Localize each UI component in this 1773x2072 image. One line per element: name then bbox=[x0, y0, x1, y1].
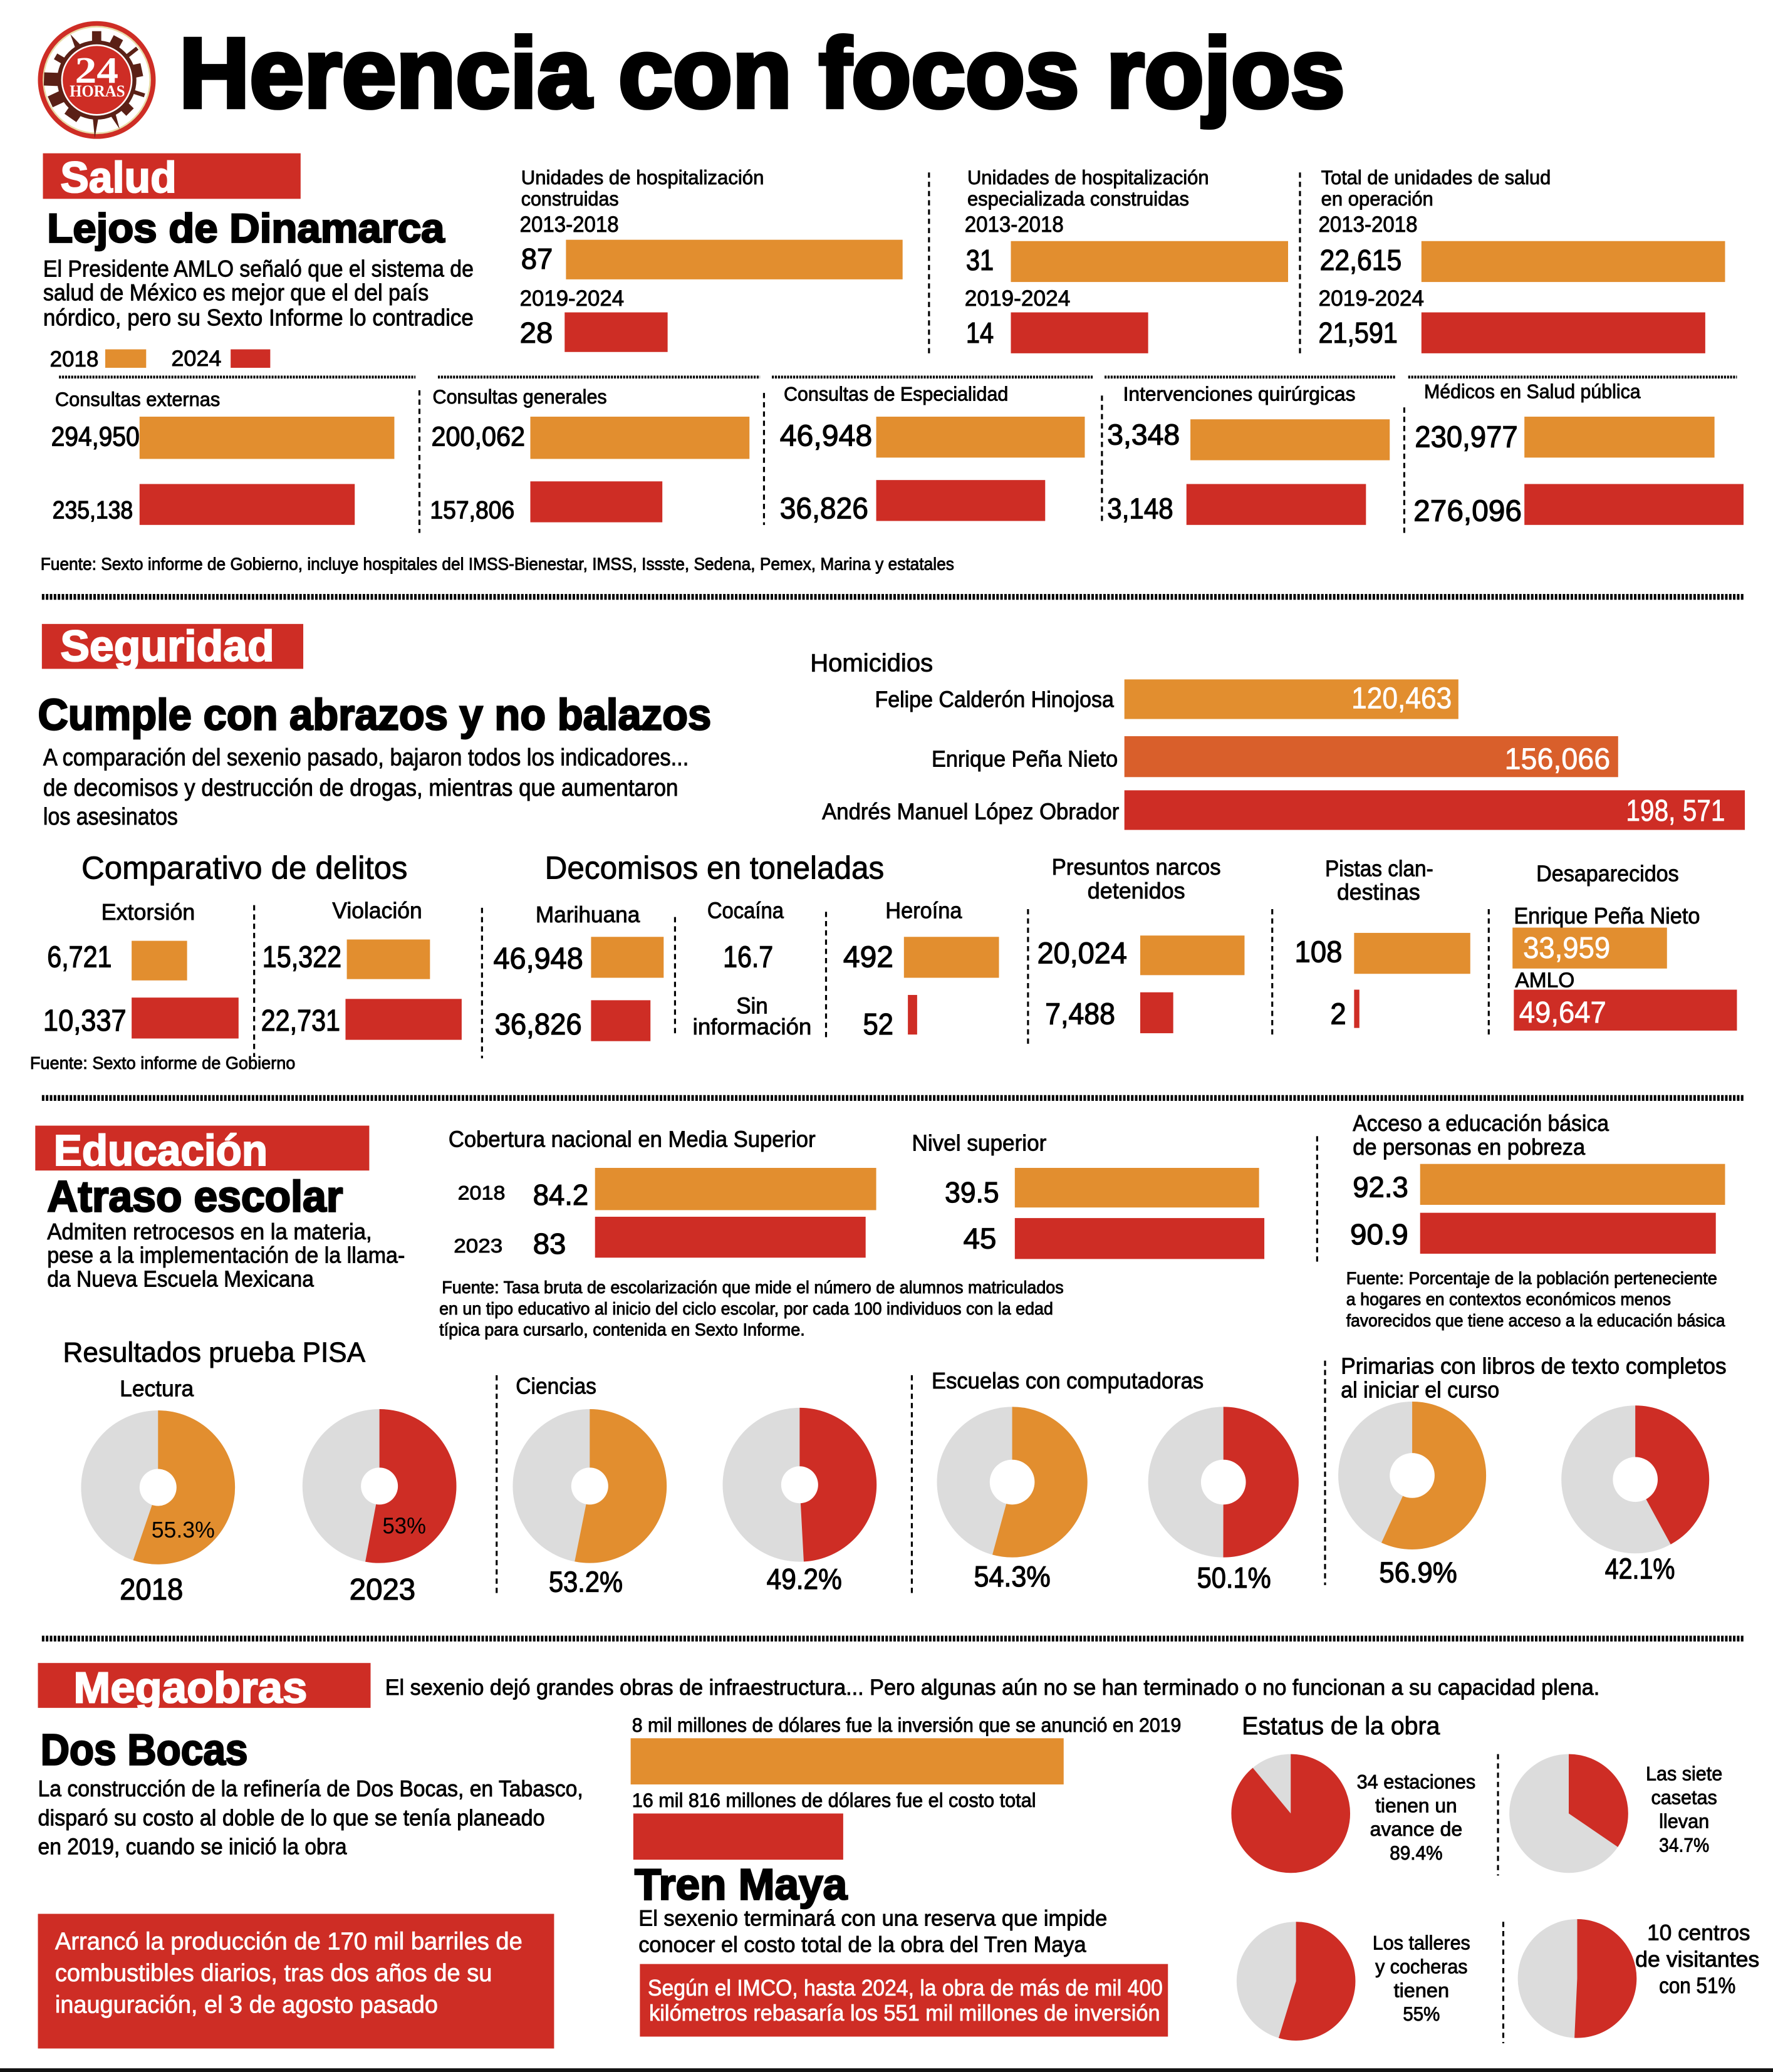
pie: estaciones: 89.4% bbox=[1390, 1841, 1443, 1864]
chart: homicidios: Felipe Calderón Hinojosa bbox=[875, 687, 1114, 712]
source note: población: favorecidos que tiene acceso a la educación básica bbox=[1346, 1311, 1725, 1330]
chart: total de unidades de salud: 2019-2024 bbox=[1318, 287, 1424, 311]
chart: consultas generales: 157,806 bbox=[430, 496, 514, 524]
source note: Seguridad: Fuente: Sexto informe de Gobierno bbox=[30, 1053, 295, 1073]
text block: Salud intro: El Presidente AMLO señaló que el sistema de bbox=[43, 256, 474, 282]
chart: pistas clandestinas: 2 bbox=[1330, 997, 1346, 1031]
donuts: ciencias: Ciencias bbox=[516, 1373, 596, 1398]
chart: heroína: Heroína bbox=[885, 898, 962, 924]
chart: médicos en salud pública bbox=[1413, 380, 1744, 528]
logo: 24 Horas bbox=[38, 21, 155, 139]
chart: presuntos narcos detenidos: detenidos bbox=[1088, 878, 1185, 903]
donuts: lectura: 53% bbox=[382, 1514, 426, 1539]
legend bbox=[49, 347, 270, 372]
callout: producción: Arrancó la producción de 170 mil barriles de bbox=[55, 1928, 523, 1955]
heading: Decomisos en toneladas: Decomisos en toneladas bbox=[545, 850, 884, 886]
chart: costo Dos Bocas bbox=[631, 1714, 1181, 1860]
chart: extorsión: Extorsión bbox=[101, 900, 195, 925]
chart: consultas generales: Consultas generales bbox=[433, 385, 607, 408]
source note: población: Fuente: Porcentaje de la población perteneciente bbox=[1346, 1268, 1717, 1288]
heading: Tren Maya: Tren Maya bbox=[635, 1860, 848, 1908]
donuts: primarias con libros de texto: 56.9% bbox=[1379, 1556, 1457, 1589]
text block: Educación intro: Admiten retrocesos en la materia, bbox=[47, 1219, 372, 1244]
source note: Salud: Fuente: Sexto informe de Gobierno, incluye hospitales del IMSS-Bienestar, IMSS, Issste, Sedena, Pemex, Marina y estatales bbox=[41, 554, 954, 573]
text block: Tren Maya: El sexenio terminará con una reserva que impide bbox=[638, 1907, 1107, 1931]
chart: extorsión: 10,337 bbox=[43, 1004, 127, 1038]
source note: tasa bruta: en un tipo educativo al inicio del ciclo escolar, por cada 100 individuos con la edad bbox=[439, 1299, 1053, 1318]
chart: presuntos narcos detenidos bbox=[1037, 855, 1244, 1033]
chart: unidades de hospitalización especializada: 2019-2024 bbox=[965, 287, 1070, 311]
callout: producción: combustibles diarios, tras dos años de su bbox=[55, 1960, 492, 1987]
text block: Dos Bocas bbox=[38, 1776, 583, 1860]
chart: consultas de especialidad: 46,948 bbox=[780, 419, 872, 452]
chart: unidades de hospitalización construidas: construidas bbox=[521, 187, 619, 210]
chart: intervenciones quirúrgicas: 3,348 bbox=[1107, 418, 1180, 450]
chart: desaparecidos: Enrique Peña Nieto bbox=[1514, 903, 1700, 929]
donuts: escuelas con computadoras: 54.3% bbox=[974, 1560, 1051, 1593]
chart: unidades de hospitalización especializada: 14 bbox=[966, 316, 994, 349]
text block: Seguridad intro: de decomisos y destrucción de drogas, mientras que aumentaron bbox=[43, 775, 678, 801]
chart: unidades de hospitalización construidas: 2013-2018 bbox=[520, 213, 619, 237]
chart: consultas generales bbox=[430, 385, 749, 524]
chart: heroína bbox=[843, 898, 999, 1041]
donuts: primarias con libros de texto: al iniciar el curso bbox=[1341, 1378, 1499, 1403]
donuts: primarias con libros de texto bbox=[1338, 1354, 1727, 1589]
chart: acceso a educación básica: de personas en pobreza bbox=[1353, 1135, 1585, 1160]
donuts: lectura bbox=[81, 1377, 456, 1606]
chart: costo Dos Bocas: 8 mil millones de dólares fue la inversión que se anunció en 2019 bbox=[632, 1714, 1181, 1736]
chart: médicos en salud pública: 230,977 bbox=[1415, 420, 1518, 454]
chart: consultas externas: 294,950 bbox=[51, 422, 140, 452]
source note: tasa bruta: Fuente: Tasa bruta de escolarización que mide el número de alumnos matriculados bbox=[442, 1278, 1064, 1297]
text block: Educación intro bbox=[47, 1219, 405, 1292]
chart: nivel superior: 39.5 bbox=[945, 1176, 999, 1209]
chart: acceso a educación básica bbox=[1350, 1111, 1725, 1254]
text block: Dos Bocas: disparó su costo al doble de lo que se tenía planeado bbox=[38, 1805, 545, 1830]
text block: Dos Bocas: en 2019, cuando se inició la obra bbox=[38, 1835, 347, 1860]
chart: cocaína: Sin bbox=[736, 993, 768, 1018]
chart: cobertura media superior: Cobertura nacional en Media Superior bbox=[449, 1127, 816, 1152]
chart: intervenciones quirúrgicas: 3,148 bbox=[1107, 492, 1173, 524]
pie: centros de visitantes: de visitantes bbox=[1635, 1948, 1759, 1972]
chart: homicidios bbox=[810, 650, 1745, 830]
source note: tasa bruta: típica para cursarlo, contenida en Sexto Informe. bbox=[439, 1320, 805, 1340]
donuts: lectura: 55.3% bbox=[152, 1518, 215, 1543]
chart: homicidios: Enrique Peña Nieto bbox=[932, 746, 1118, 771]
chart: presuntos narcos detenidos: 20,024 bbox=[1037, 936, 1127, 970]
chart: cocaína bbox=[693, 898, 811, 1039]
text block: Seguridad intro bbox=[43, 744, 689, 830]
chart: intervenciones quirúrgicas: Intervenciones quirúrgicas bbox=[1123, 383, 1355, 405]
chart: pistas clandestinas: Pistas clan- bbox=[1325, 856, 1433, 881]
section banner: Seguridad: Seguridad bbox=[60, 622, 274, 670]
pie: talleres: Los talleres bbox=[1373, 1931, 1470, 1954]
section banner: Educación bbox=[35, 1126, 369, 1175]
donuts: primarias con libros de texto: 42.1% bbox=[1605, 1552, 1675, 1585]
panel: Salud bbox=[41, 153, 1744, 573]
pie: centros de visitantes: 10 centros bbox=[1647, 1922, 1750, 1945]
text block: Educación intro: pese a la implementación de la llama- bbox=[47, 1243, 405, 1268]
pie: talleres: y cocheras bbox=[1375, 1955, 1468, 1977]
pie: estaciones: 34 estaciones bbox=[1357, 1770, 1475, 1793]
chart: violación bbox=[261, 898, 462, 1040]
pie: casetas: casetas bbox=[1651, 1786, 1717, 1809]
chart: desaparecidos: Desaparecidos bbox=[1536, 862, 1679, 887]
chart: consultas externas: 235,138 bbox=[53, 496, 133, 524]
section banner: Megaobras: Megaobras bbox=[73, 1663, 307, 1712]
donuts: ciencias bbox=[512, 1373, 876, 1598]
title: Herencia con focos rojos bbox=[179, 18, 1345, 128]
chart: desaparecidos: 33,959 bbox=[1523, 931, 1610, 965]
donuts: ciencias: 53.2% bbox=[549, 1565, 623, 1598]
chart: marihuana: 36,826 bbox=[495, 1007, 582, 1041]
chart: heroína: 52 bbox=[863, 1007, 893, 1041]
chart: consultas externas bbox=[51, 388, 394, 525]
pie: talleres: 55% bbox=[1403, 2002, 1440, 2025]
chart: consultas externas: Consultas externas bbox=[55, 388, 220, 410]
chart: violación: 15,322 bbox=[263, 940, 341, 974]
chart: consultas de especialidad: 36,826 bbox=[780, 491, 868, 525]
chart: cocaína: 16.7 bbox=[723, 940, 773, 974]
pie: estaciones: tienen un bbox=[1375, 1794, 1457, 1816]
chart: cobertura media superior: 2018 bbox=[458, 1182, 505, 1204]
text block: Megaobras intro: El sexenio dejó grandes obras de infraestructura... Pero algunas aún no se han terminado o no funcionan a su capacidad plena. bbox=[385, 1676, 1599, 1700]
logo: 24 Horas: 24 bbox=[75, 49, 118, 91]
text block: Tren Maya: conocer el costo total de la obra del Tren Maya bbox=[638, 1934, 1086, 1957]
section banner: Salud: Salud bbox=[60, 153, 177, 202]
text block: Salud intro: nórdico, pero su Sexto Informe lo contradice bbox=[43, 305, 474, 331]
chart: acceso a educación básica: 92.3 bbox=[1353, 1170, 1408, 1203]
chart: acceso a educación básica: 90.9 bbox=[1350, 1218, 1408, 1251]
source note: tasa bruta bbox=[439, 1278, 1064, 1340]
pie: casetas: Las siete bbox=[1646, 1762, 1722, 1785]
source note: población: a hogares en contextos económicos menos bbox=[1346, 1289, 1671, 1309]
chart: intervenciones quirúrgicas bbox=[1107, 383, 1390, 525]
chart: pistas clandestinas: 108 bbox=[1295, 935, 1342, 969]
text block: Tren Maya bbox=[638, 1907, 1107, 1957]
chart: violación: Violación bbox=[332, 898, 422, 924]
chart: costo Dos Bocas: 16 mil 816 millones de dólares fue el costo total bbox=[632, 1789, 1036, 1811]
donuts: lectura: 2023 bbox=[350, 1573, 415, 1606]
pie: estaciones: avance de bbox=[1370, 1818, 1462, 1840]
logo: 24 Horas: HORAS bbox=[70, 82, 125, 100]
heading: Dos Bocas: Dos Bocas bbox=[41, 1725, 248, 1774]
chart: unidades de hospitalización construidas bbox=[520, 166, 903, 352]
chart: desaparecidos: AMLO bbox=[1515, 968, 1574, 992]
callout: IMCO: Según el IMCO, hasta 2024, la obra de más de mil 400 bbox=[648, 1976, 1163, 2001]
heading: Atraso escolar: Atraso escolar bbox=[47, 1172, 343, 1221]
donuts: lectura: Lectura bbox=[120, 1377, 194, 1402]
callout: IMCO bbox=[640, 1964, 1168, 2037]
panel: Megaobras bbox=[38, 1663, 1759, 2048]
chart: consultas de especialidad bbox=[780, 383, 1084, 525]
chart: homicidios: Andrés Manuel López Obrador bbox=[822, 799, 1119, 825]
heading: Resultados prueba PISA: Resultados prueba PISA bbox=[63, 1338, 366, 1368]
chart: consultas generales: 200,062 bbox=[431, 422, 525, 452]
chart: cobertura media superior: 84.2 bbox=[533, 1179, 588, 1211]
chart: cocaína: Cocaína bbox=[707, 898, 784, 924]
chart: cocaína: información bbox=[693, 1014, 811, 1039]
chart: médicos en salud pública: 276,096 bbox=[1413, 494, 1522, 528]
chart: cobertura media superior: 83 bbox=[533, 1227, 566, 1260]
section banner: Educación: Educación bbox=[54, 1126, 268, 1175]
chart: unidades de hospitalización especializada: Unidades de hospitalización bbox=[967, 166, 1209, 189]
chart: total de unidades de salud: 21,591 bbox=[1318, 316, 1398, 349]
section banner: Megaobras bbox=[38, 1663, 371, 1712]
chart: total de unidades de salud bbox=[1318, 166, 1725, 353]
pie: casetas: llevan bbox=[1659, 1810, 1709, 1833]
chart: heroína: 492 bbox=[843, 940, 893, 974]
legend: 2018 bbox=[49, 348, 98, 372]
chart: nivel superior: Nivel superior bbox=[912, 1131, 1046, 1156]
text block: Salud intro: salud de México es mejor que el del país bbox=[43, 280, 429, 306]
panel: Educación bbox=[35, 1111, 1727, 1606]
chart: extorsión bbox=[43, 900, 239, 1039]
chart: nivel superior: 45 bbox=[964, 1222, 996, 1255]
text block: Seguridad intro: A comparación del sexenio pasado, bajaron todos los indicadores... bbox=[43, 744, 689, 771]
chart: unidades de hospitalización especializada: 31 bbox=[966, 244, 994, 276]
chart: unidades de hospitalización especializada: especializada construidas bbox=[967, 187, 1189, 210]
chart: unidades de hospitalización construidas: 2019-2024 bbox=[520, 287, 624, 311]
chart: presuntos narcos detenidos: Presuntos narcos bbox=[1052, 855, 1221, 880]
callout: producción: inauguración, el 3 de agosto pasado bbox=[55, 1992, 438, 2019]
chart: total de unidades de salud: Total de unidades de salud bbox=[1321, 166, 1551, 189]
chart: pistas clandestinas: destinas bbox=[1337, 880, 1420, 905]
text block: Salud intro bbox=[43, 256, 474, 331]
source note: población bbox=[1346, 1268, 1725, 1330]
donuts: primarias con libros de texto: Primarias con libros de texto completos bbox=[1341, 1354, 1727, 1379]
donuts: lectura: 2018 bbox=[120, 1573, 183, 1606]
heading: Comparativo de delitos: Comparativo de delitos bbox=[81, 850, 408, 886]
chart: marihuana bbox=[493, 902, 663, 1041]
chart: total de unidades de salud: 22,615 bbox=[1320, 244, 1401, 276]
chart: unidades de hospitalización especializada: 2013-2018 bbox=[965, 213, 1064, 237]
pie: centros de visitantes: con 51% bbox=[1659, 1974, 1735, 1998]
chart: desaparecidos: 49,647 bbox=[1519, 996, 1606, 1029]
chart: total de unidades de salud: en operación bbox=[1321, 187, 1433, 210]
pie: talleres: tienen bbox=[1394, 1979, 1449, 2001]
chart: extorsión: 6,721 bbox=[47, 940, 112, 974]
text block: Educación intro: da Nueva Escuela Mexicana bbox=[47, 1267, 314, 1292]
donuts: ciencias: 49.2% bbox=[767, 1563, 842, 1595]
donuts: escuelas con computadoras: Escuelas con computadoras bbox=[932, 1368, 1204, 1393]
pie: casetas: 34.7% bbox=[1659, 1834, 1709, 1856]
chart: unidades de hospitalización construidas: 28 bbox=[520, 316, 553, 349]
chart: pistas clandestinas bbox=[1295, 856, 1470, 1031]
chart: cobertura media superior bbox=[449, 1127, 876, 1260]
chart: presuntos narcos detenidos: 7,488 bbox=[1045, 997, 1115, 1031]
pie: centros de visitantes bbox=[1518, 1919, 1759, 2038]
text block: Dos Bocas: La construcción de la refinería de Dos Bocas, en Tabasco, bbox=[38, 1776, 583, 1801]
section banner: Salud bbox=[43, 153, 301, 202]
chart: consultas de especialidad: Consultas de Especialidad bbox=[784, 383, 1008, 405]
pie: talleres bbox=[1237, 1922, 1470, 2041]
panel: Seguridad bbox=[30, 622, 1745, 1073]
heading: Estatus de la obra: Estatus de la obra bbox=[1242, 1712, 1440, 1740]
chart: acceso a educación básica: Acceso a educación básica bbox=[1353, 1111, 1609, 1136]
callout: producción bbox=[38, 1914, 554, 2048]
chart: cobertura media superior: 2023 bbox=[454, 1234, 502, 1257]
chart: marihuana: Marihuana bbox=[536, 902, 640, 927]
chart: homicidios: 156,066 bbox=[1505, 742, 1610, 776]
text block: Seguridad intro: los asesinatos bbox=[43, 804, 178, 830]
donuts: escuelas con computadoras bbox=[932, 1368, 1299, 1594]
donuts: escuelas con computadoras: 50.1% bbox=[1197, 1561, 1271, 1594]
chart: homicidios: Homicidios bbox=[810, 650, 933, 677]
chart: total de unidades de salud: 2013-2018 bbox=[1318, 213, 1418, 237]
chart: desaparecidos bbox=[1512, 862, 1737, 1031]
heading: Cumple con abrazos y no balazos: Cumple con abrazos y no balazos bbox=[38, 690, 711, 739]
chart: unidades de hospitalización construidas: 87 bbox=[521, 242, 553, 275]
legend: 2024 bbox=[171, 347, 221, 371]
chart: unidades de hospitalización construidas: Unidades de hospitalización bbox=[521, 166, 764, 189]
chart: homicidios: 198, 571 bbox=[1626, 794, 1725, 828]
chart: violación: 22,731 bbox=[261, 1004, 340, 1038]
chart: marihuana: 46,948 bbox=[493, 942, 583, 976]
chart: homicidios: 120,463 bbox=[1351, 682, 1452, 716]
callout: IMCO: kilómetros rebasaría los 551 mil millones de inversión bbox=[649, 2001, 1160, 2026]
heading: Lejos de Dinamarca: Lejos de Dinamarca bbox=[47, 205, 445, 251]
pie: estaciones bbox=[1231, 1754, 1475, 1873]
chart: nivel superior bbox=[912, 1131, 1264, 1259]
pie: casetas bbox=[1509, 1754, 1722, 1873]
chart: unidades de hospitalización especializada bbox=[965, 166, 1288, 353]
chart: médicos en salud pública: Médicos en Salud pública bbox=[1424, 380, 1641, 403]
